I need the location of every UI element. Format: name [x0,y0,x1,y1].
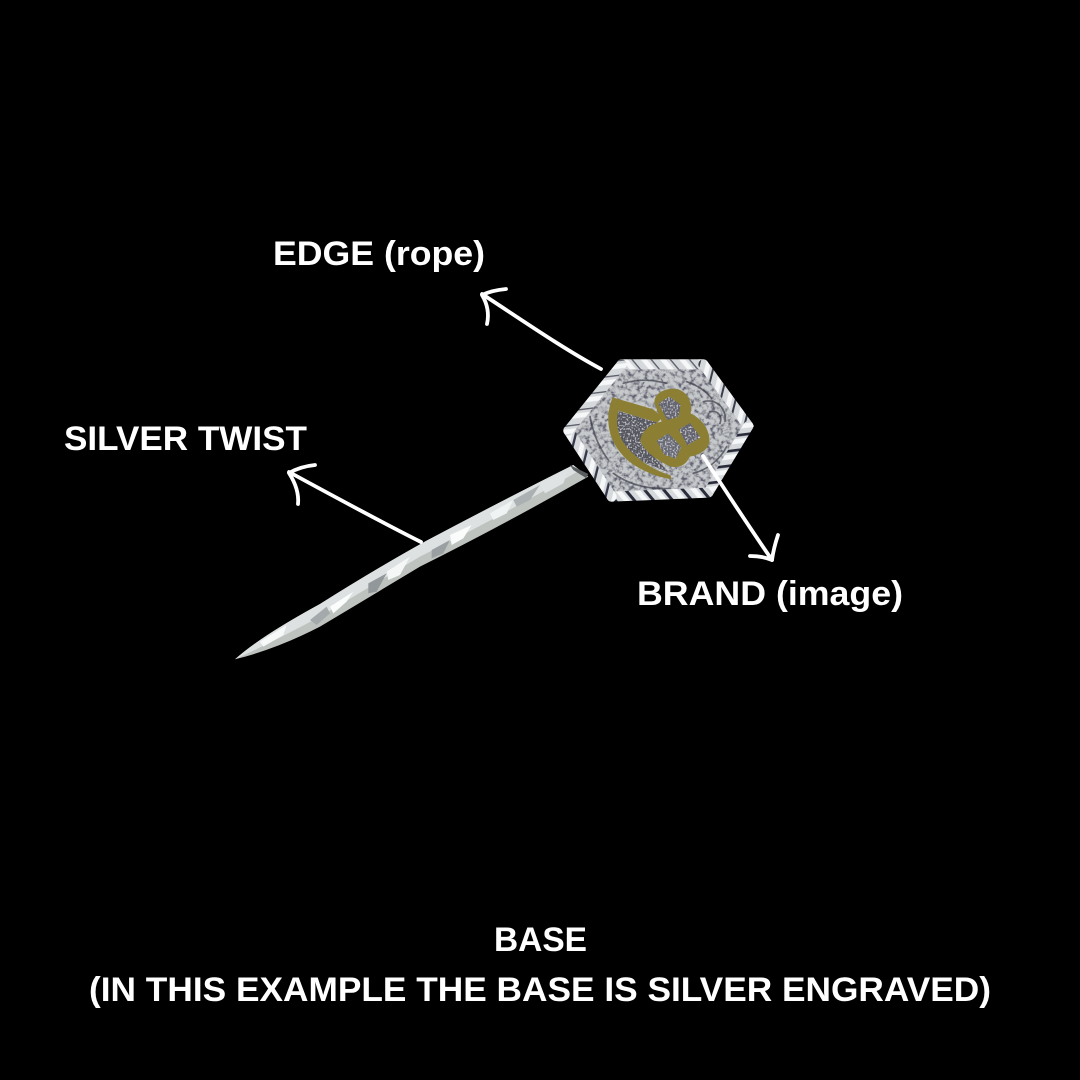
caption: base: (IN THIS EXAMPLE THE BASE IS SILVER ENGRAVED) [89,971,991,1009]
label: silver twist: SILVER TWIST [64,420,307,458]
label: edge: EDGE (rope) [273,235,485,273]
engraved scrollwork [590,380,727,489]
dotted field behind brand [615,411,669,473]
arrow: brand [703,456,778,560]
arrow: silver twist [289,465,421,542]
caption: base: BASE [494,921,587,959]
brooch: engraved hexagon head [563,359,754,501]
arrow: edge [482,289,601,369]
label: brand: BRAND (image) [637,575,903,613]
caption: base [89,921,991,1009]
pin: silver twist shaft [235,465,588,659]
rope edge [568,364,748,497]
silver engraved base [563,359,754,501]
brand: gold letter mark [608,389,709,479]
